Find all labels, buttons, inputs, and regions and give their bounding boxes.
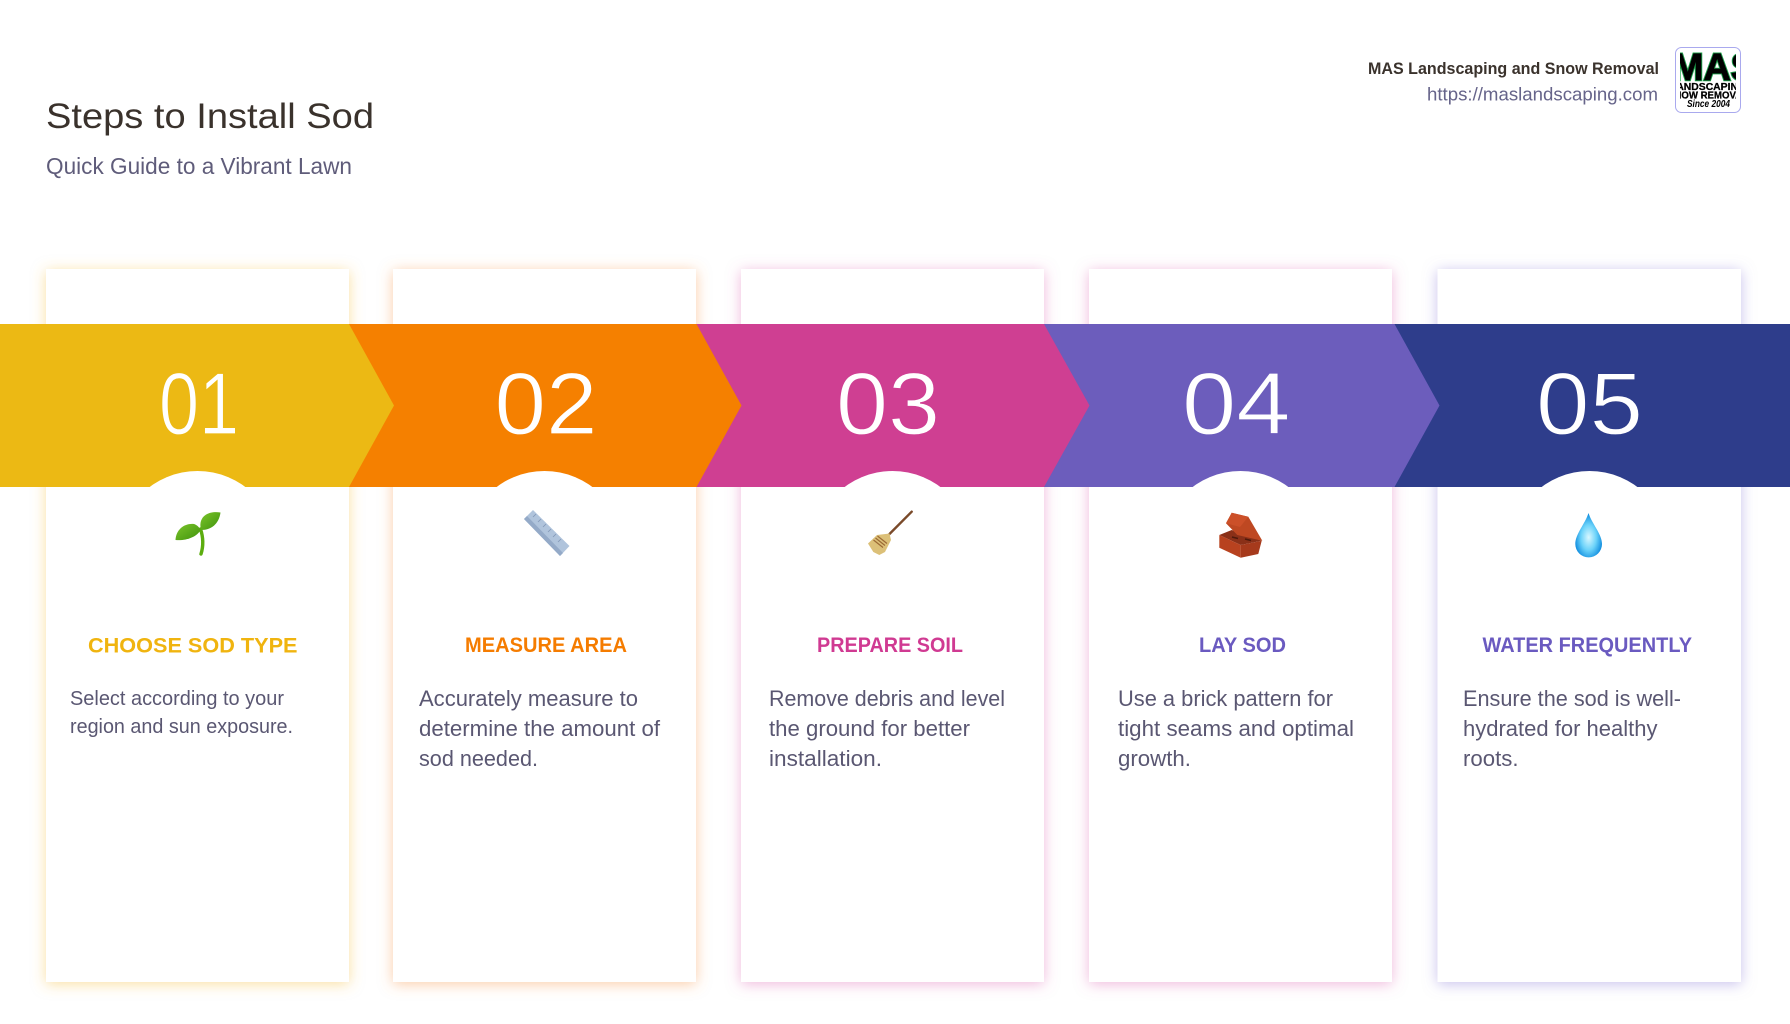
description: sod needed. (419, 746, 538, 771)
description (769, 686, 1005, 771)
description: the ground for better (769, 716, 970, 741)
heading: WATER FREQUENTLY (1482, 633, 1692, 657)
description: Ensure the sod is well- (1463, 686, 1681, 711)
description: Select according to your (70, 687, 284, 710)
description: region and sun exposure. (70, 715, 293, 738)
icon: sprout (176, 512, 220, 554)
number 02: 02 (494, 354, 598, 453)
logo: LANDSCAPING (1670, 81, 1746, 93)
description: determine the amount of (419, 716, 661, 741)
step 4 text (1118, 633, 1354, 771)
arrow 2 (349, 324, 742, 487)
heading: LAY SOD (1199, 633, 1286, 657)
description: Remove debris and level (769, 686, 1005, 711)
arrow 3 (696, 324, 1090, 487)
step 3 text (769, 633, 1005, 771)
logo: SNOW REMOVAL (1668, 90, 1749, 102)
description: growth. (1118, 746, 1191, 771)
arrow 5 (1394, 324, 1790, 487)
description: Use a brick pattern for (1118, 686, 1333, 711)
heading: PREPARE SOIL (817, 633, 963, 657)
description (419, 686, 661, 771)
icon: ruler (524, 510, 570, 556)
arrow 4 (1044, 324, 1440, 487)
logo (1675, 47, 1741, 113)
brand name: MAS Landscaping and Snow Removal (1368, 59, 1659, 78)
step 1 text (70, 634, 298, 738)
chevron band (0, 324, 1790, 487)
panel: card 3 (741, 269, 1044, 982)
icon: water drop (1575, 513, 1602, 557)
panel: card 5 (1438, 269, 1741, 982)
description: tight seams and optimal (1118, 716, 1354, 741)
description: hydrated for healthy (1463, 716, 1658, 741)
number 05: 05 (1536, 354, 1643, 453)
description (1463, 686, 1681, 771)
heading: MEASURE AREA (465, 633, 627, 657)
step 2 text (419, 633, 661, 771)
description: Accurately measure to (419, 686, 638, 711)
icon backing circles (118, 471, 1670, 631)
description: installation. (769, 746, 882, 771)
description: roots. (1463, 746, 1518, 771)
logo: MAS (1672, 47, 1756, 89)
arrow 1 (0, 324, 394, 487)
card backgrounds (46, 269, 1741, 982)
description (70, 687, 293, 738)
panel: card 1 (46, 269, 349, 982)
heading: CHOOSE SOD TYPE (88, 634, 298, 658)
panel: card 2 (393, 269, 696, 982)
brand url: https://maslandscaping.com (1427, 84, 1658, 104)
step numbers (159, 354, 1643, 453)
number 04: 04 (1182, 354, 1290, 453)
icon: broom (868, 512, 912, 555)
logo: Since 2004 (1687, 99, 1730, 110)
step 5 text (1463, 633, 1692, 771)
icon: brick (1219, 513, 1262, 558)
panel: card 4 (1089, 269, 1392, 982)
number 01: 01 (159, 354, 239, 453)
number 03: 03 (836, 354, 940, 453)
logo: MAS (1672, 47, 1756, 89)
subtitle: Quick Guide to a Vibrant Lawn (46, 153, 352, 179)
description (1118, 686, 1354, 771)
title: Steps to Install Sod (46, 96, 374, 136)
